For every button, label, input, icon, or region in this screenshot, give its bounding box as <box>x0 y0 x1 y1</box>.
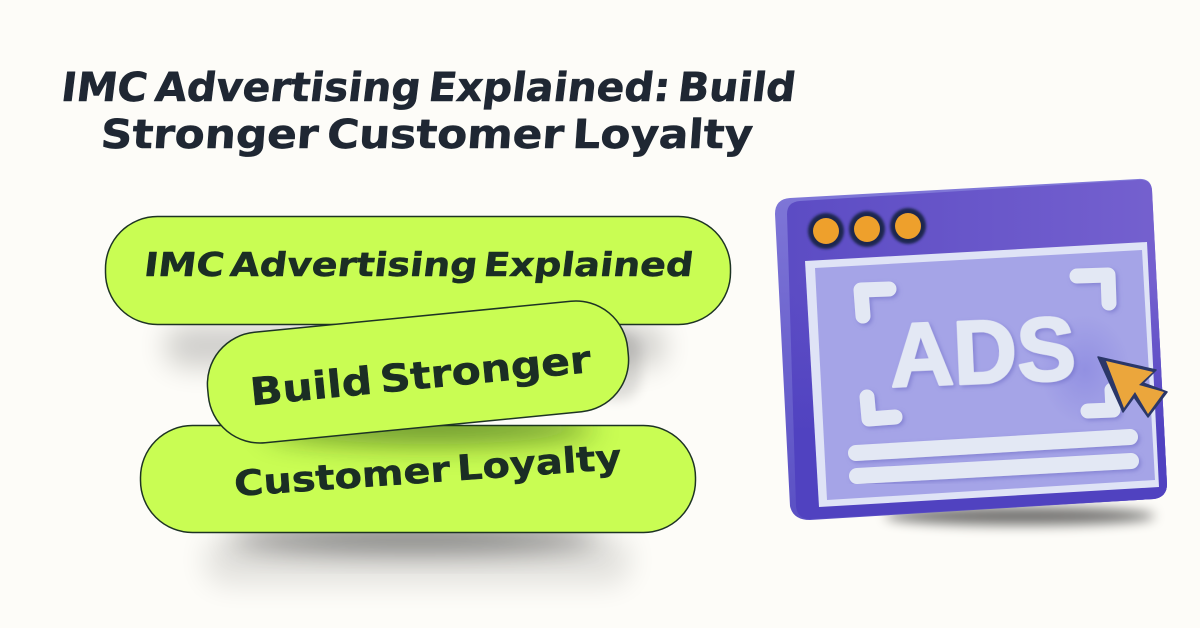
pill: IMC Advertising Explained <box>106 216 730 324</box>
title: Stronger Customer Loyalty <box>99 112 755 158</box>
pill: Customer Loyalty <box>140 412 696 532</box>
screen frame <box>805 242 1159 507</box>
shadow: top pill <box>165 325 665 367</box>
pill: Build Stronger <box>203 296 633 448</box>
window body <box>787 180 1167 519</box>
pill: Customer Loyalty: Customer Loyalty <box>233 438 623 505</box>
ADS lettering: ADS <box>888 299 1078 407</box>
window side edge <box>775 179 1167 520</box>
pill stack <box>106 216 730 585</box>
pill: IMC Advertising Explained: IMC Advertising Explained <box>142 245 696 284</box>
shadow cast on pill <box>265 412 595 444</box>
window dots <box>808 208 926 249</box>
pill: Build Stronger: Build Stronger <box>248 337 593 414</box>
window shadow <box>885 507 1155 525</box>
screen panel <box>815 250 1155 500</box>
title <box>59 65 798 158</box>
screen shade near cursor <box>1040 315 1130 425</box>
icon: ads browser window <box>775 179 1167 525</box>
title: IMC Advertising Explained: Build <box>59 65 798 111</box>
text lines <box>856 437 1131 476</box>
shadow: middle pill <box>590 330 640 400</box>
frame corners <box>861 275 1113 419</box>
cursor arrow <box>1098 357 1167 417</box>
shadow: bottom pill <box>205 526 630 585</box>
